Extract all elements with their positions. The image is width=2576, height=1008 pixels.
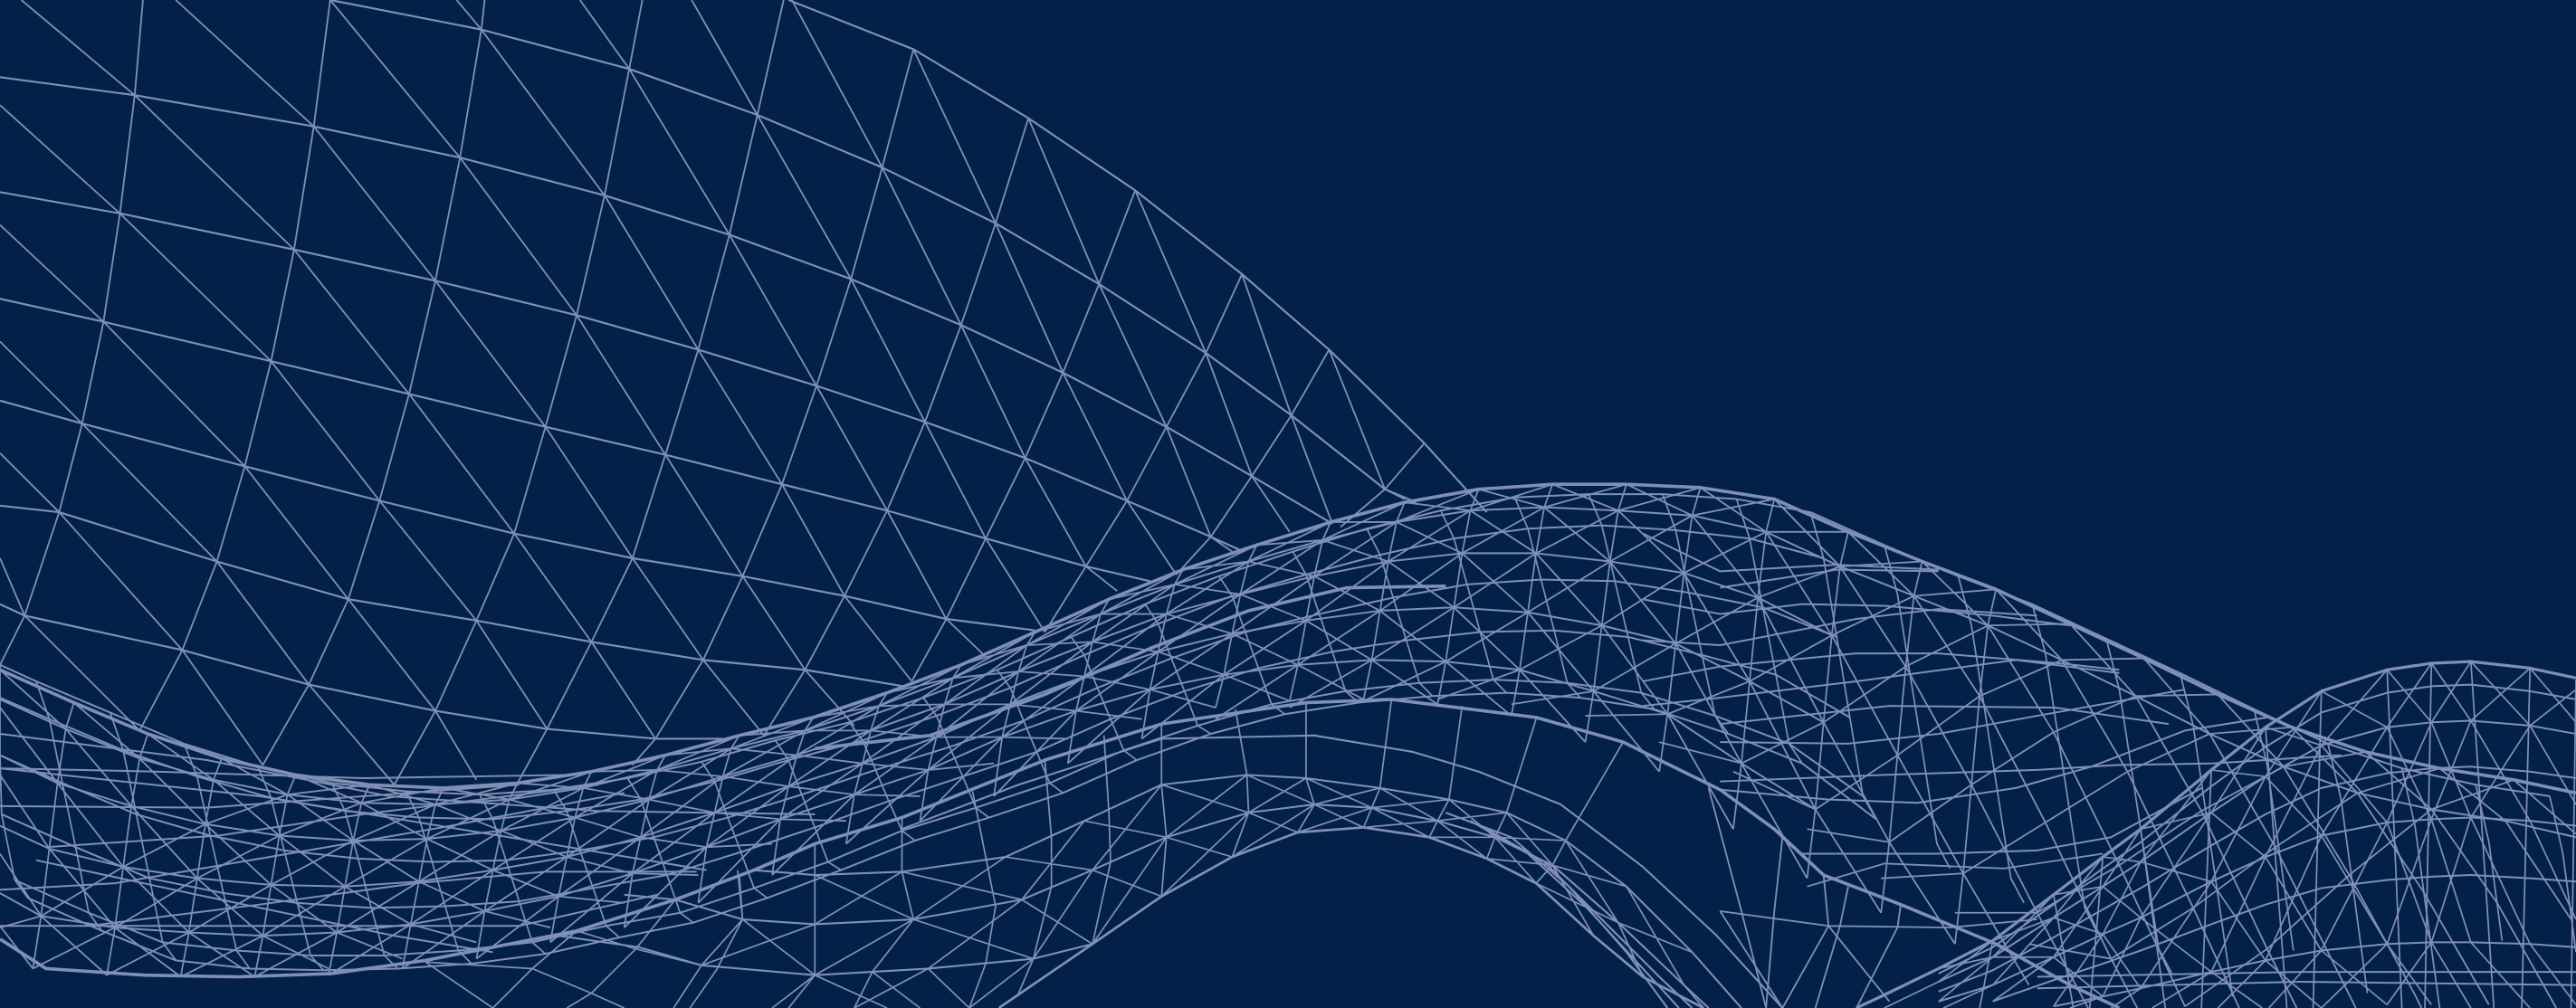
upper mesh: diagonal lines — [0, 0, 1405, 785]
ribbon: right valley rows — [1643, 534, 2341, 853]
lower arch mesh — [425, 699, 2103, 1008]
ribbon: cross lines, back set — [0, 494, 2576, 1008]
ribbon wave mesh — [0, 484, 2576, 1008]
arch: row lines — [558, 736, 1782, 1008]
ribbon: cross lines, front set — [33, 484, 1996, 977]
ribbon: down-left diagonals — [0, 484, 2514, 1006]
upper mesh: row lines — [0, 0, 1487, 738]
hump: diagonals and fans — [1884, 661, 2576, 1008]
right hump mesh — [1856, 661, 2576, 1008]
arch: cross lines and diagonals — [425, 699, 1703, 1008]
ribbon: first set of rows — [0, 508, 2576, 936]
hump: outline — [1856, 661, 2576, 1008]
upper mesh: column lines — [0, 0, 1425, 785]
ribbon: left flat rows — [0, 734, 815, 952]
arch: inner edge — [999, 827, 1703, 1008]
hump: row lines — [1939, 685, 2576, 1006]
ribbon: down-right diagonals — [0, 484, 2576, 1008]
ribbon: ridge lines — [0, 484, 2576, 1008]
valley cross lines — [1709, 788, 2103, 1008]
ribbon: second set of rows — [0, 494, 2550, 970]
upper wireframe mesh — [0, 0, 1487, 785]
